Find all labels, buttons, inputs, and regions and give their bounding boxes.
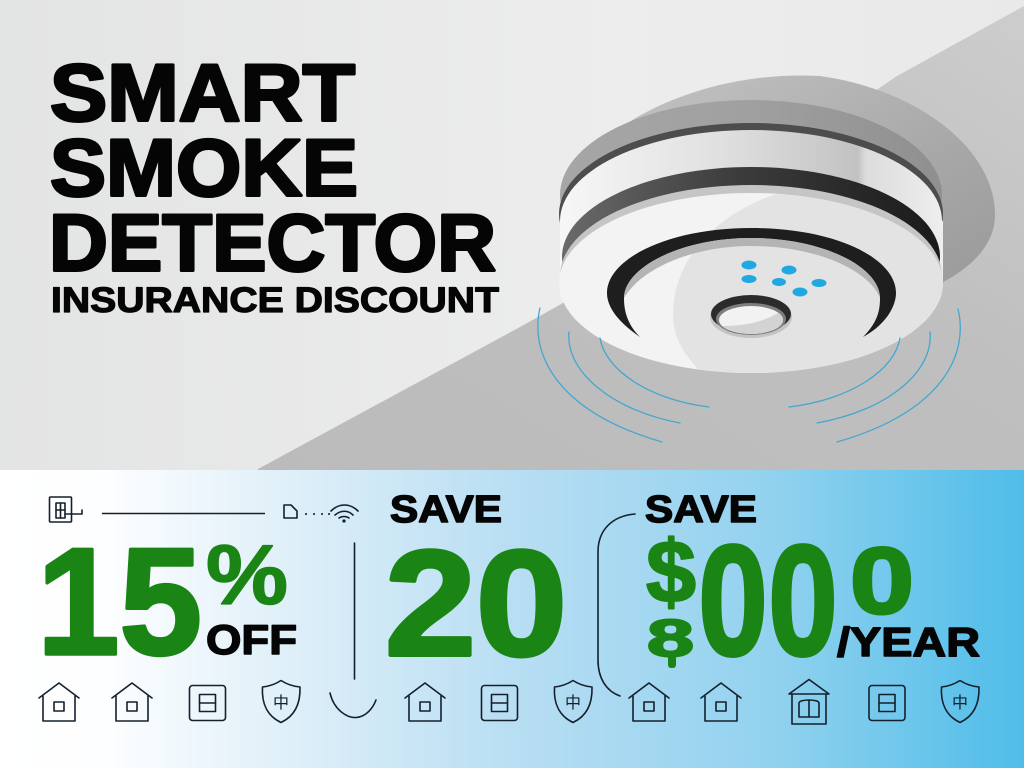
title: INSURANCE DISCOUNT bbox=[51, 281, 499, 320]
inner black ring bbox=[607, 228, 896, 337]
icon: door sensor bbox=[50, 497, 82, 522]
icon: panel 3 bbox=[869, 686, 905, 720]
stat: save $800 per year: /YEAR bbox=[837, 619, 980, 665]
stat: save $800 per year: $ bbox=[646, 522, 696, 621]
icon: shield 1: 中 bbox=[273, 694, 289, 712]
illustration: smoke detector bbox=[538, 75, 995, 442]
stat: save 20: SAVE bbox=[390, 489, 502, 531]
title bbox=[49, 48, 499, 320]
blue sensor dots bbox=[742, 260, 826, 296]
icon: panel 1 bbox=[190, 686, 226, 720]
stat: save $800 per year: SAVE bbox=[645, 489, 757, 531]
sound waves bbox=[538, 308, 960, 442]
icon: shield 3 bbox=[941, 680, 979, 722]
stat: save $800 per year: 8 bbox=[647, 610, 694, 668]
stat: save $800 per year: 0 bbox=[850, 528, 914, 633]
icon: shield 2 bbox=[554, 680, 592, 722]
icon: shield 1 bbox=[262, 680, 300, 722]
icon: house 4 bbox=[629, 683, 669, 721]
icon: large house bbox=[789, 680, 829, 724]
stat: save 20: 20 bbox=[385, 519, 567, 687]
panel: grey background bbox=[0, 0, 1024, 470]
center button bbox=[710, 295, 792, 340]
icon: house 3 bbox=[405, 683, 445, 721]
detector shadow bbox=[610, 75, 995, 286]
icon: shield 2: 中 bbox=[565, 694, 581, 712]
icon: house 2 bbox=[112, 683, 152, 721]
icon: panel 2 bbox=[482, 686, 518, 720]
stat: 15% off bbox=[37, 517, 297, 687]
icon: shield 3: 中 bbox=[952, 694, 968, 712]
stat: 15% off: % bbox=[206, 528, 288, 622]
title: SMOKE bbox=[50, 124, 358, 214]
icon: house 5 bbox=[701, 683, 741, 721]
title: DETECTOR bbox=[49, 198, 496, 288]
stat: 15% off: OFF bbox=[206, 616, 297, 663]
title: SMART bbox=[50, 48, 355, 138]
icon: house 1 bbox=[39, 683, 79, 721]
stat: save $800 per year bbox=[645, 489, 980, 689]
bracket bbox=[598, 514, 635, 696]
top connector line bbox=[102, 512, 265, 514]
icon: document with wifi bbox=[284, 505, 358, 522]
detector body bbox=[559, 100, 960, 376]
stat: 15% off: 15 bbox=[37, 517, 202, 687]
divider with arc bbox=[330, 543, 376, 718]
stat: save $800 per year: 00 bbox=[698, 513, 838, 689]
panel: savings strip bbox=[0, 470, 1024, 768]
